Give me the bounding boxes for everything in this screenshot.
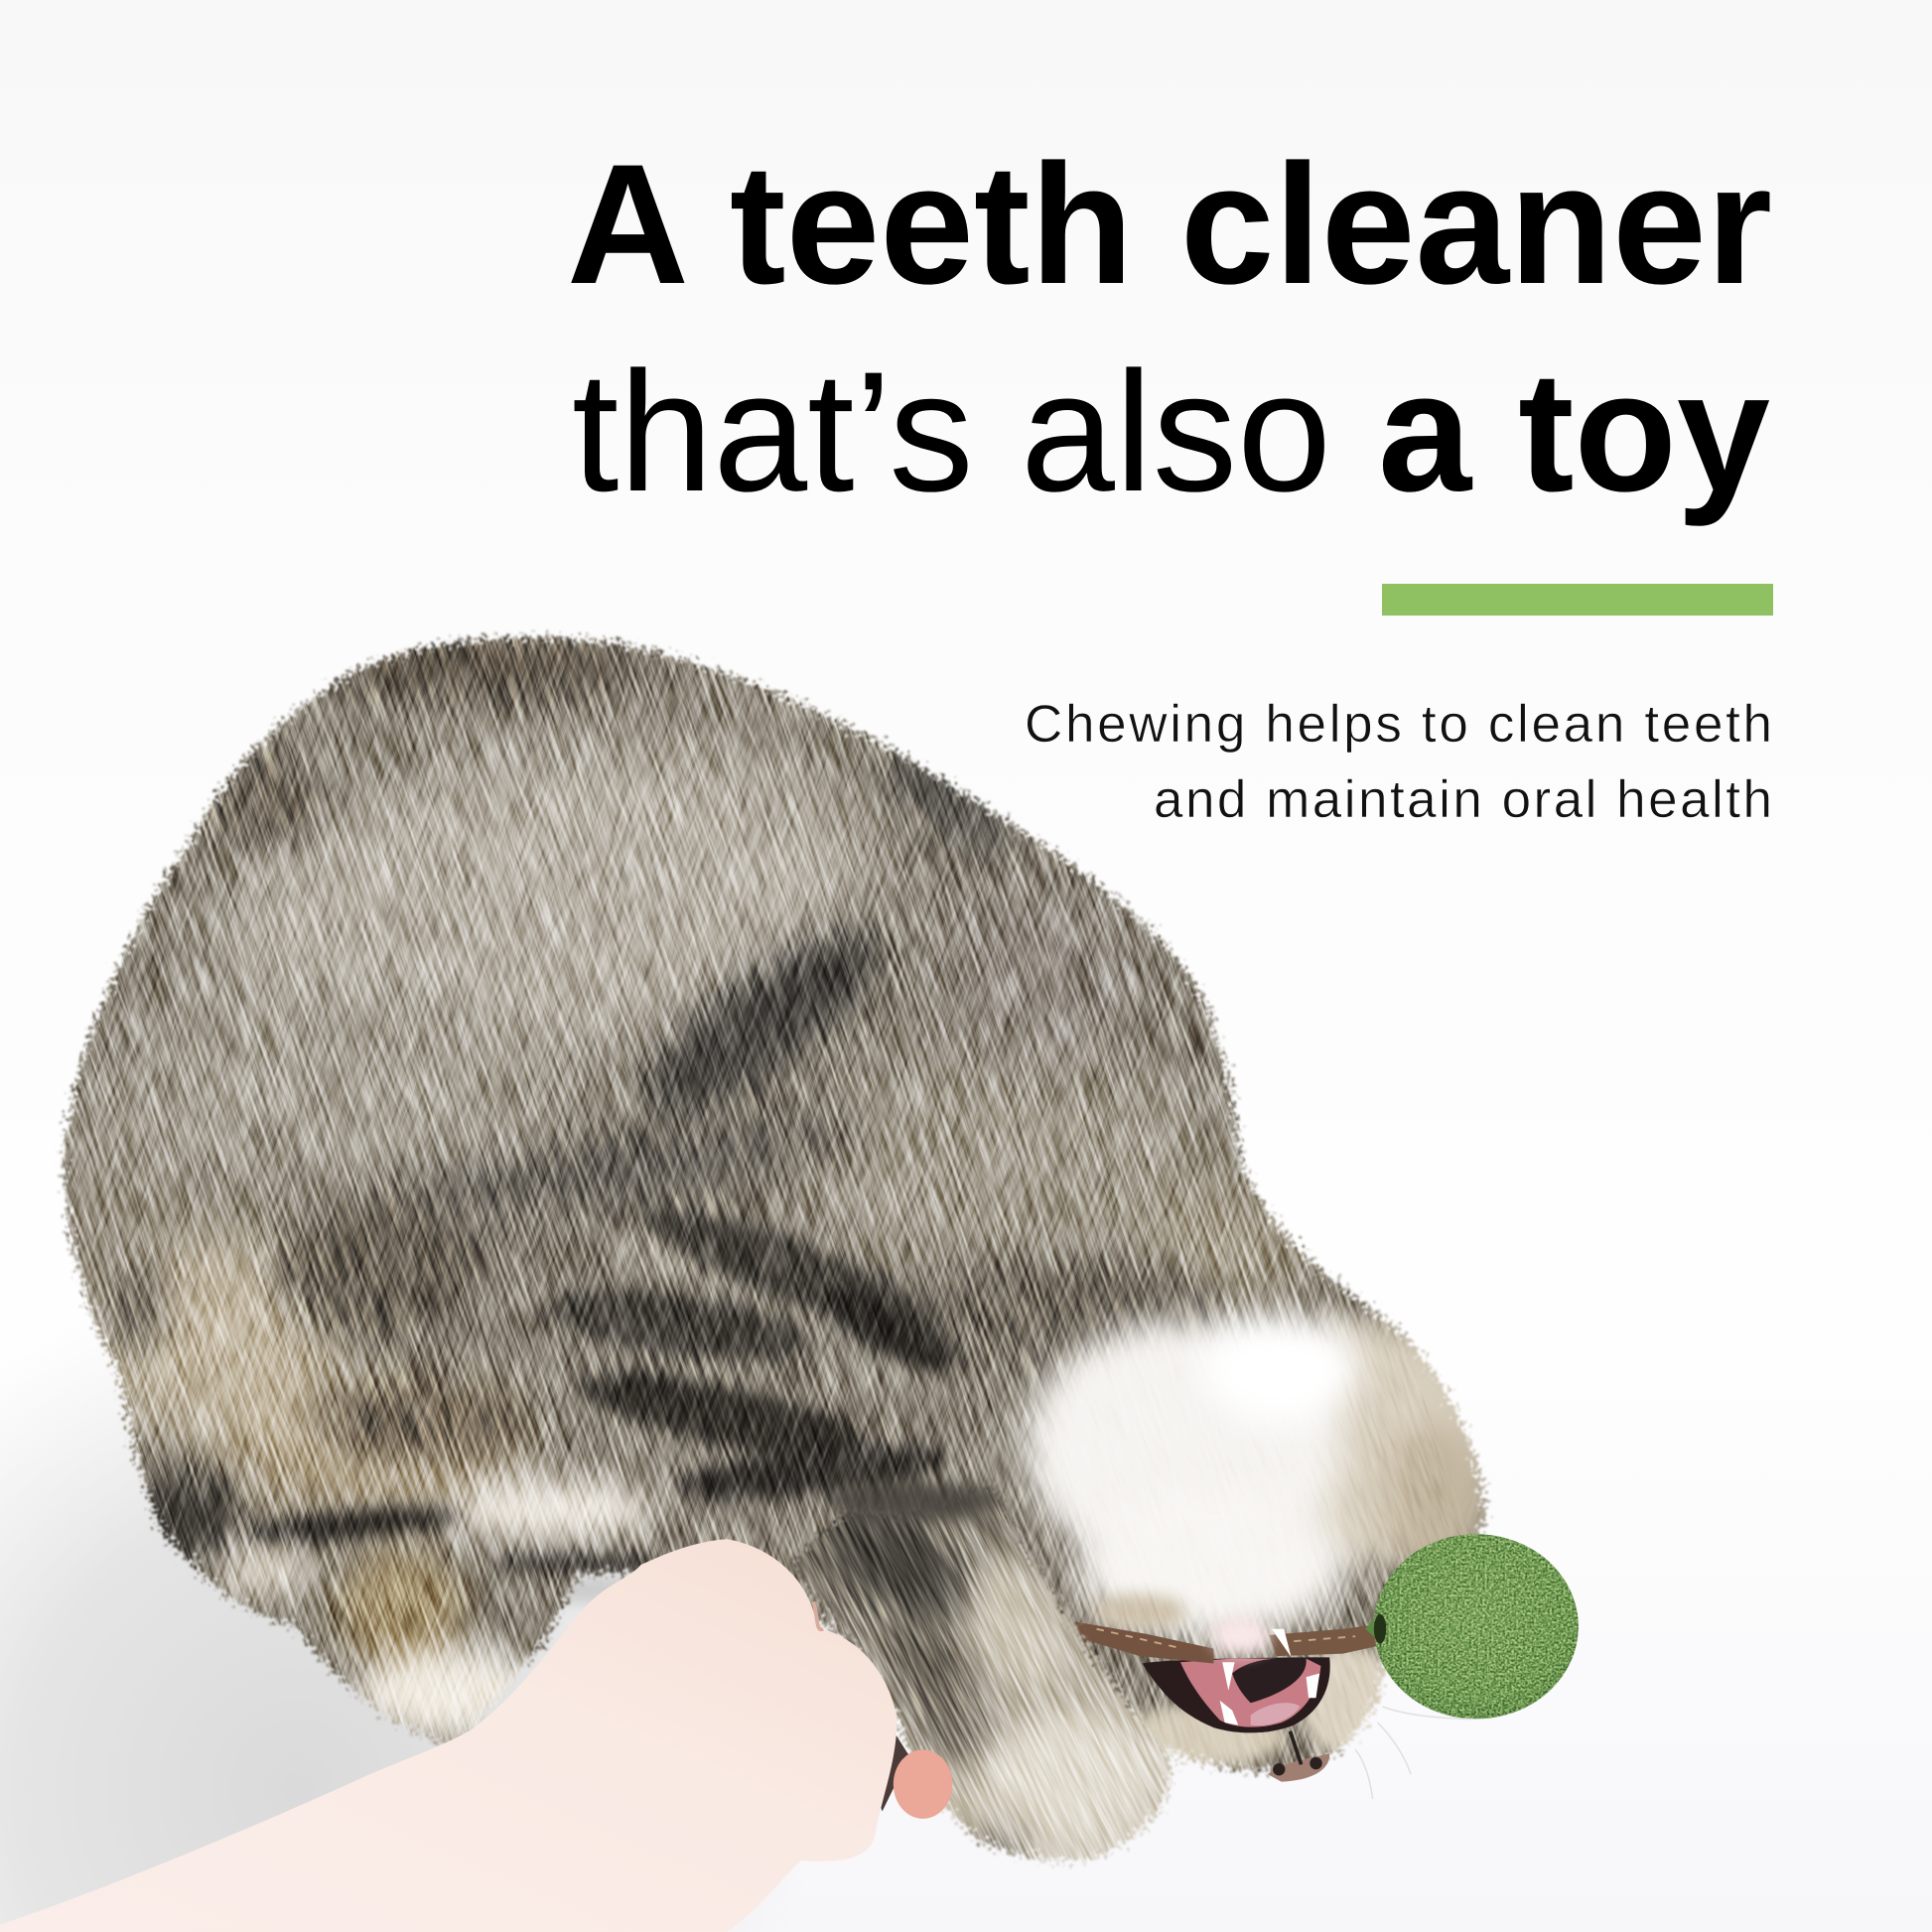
- catnip ball: [1365, 1534, 1579, 1720]
- human hand and arm: [0, 1539, 897, 1932]
- foreleg shoulder blend: [826, 1481, 998, 1521]
- fangs over stick: [1272, 1629, 1292, 1657]
- catnip stick: [1074, 1621, 1383, 1663]
- green accent bar: [1382, 584, 1773, 616]
- subheading: Chewing helps to clean teeth: [1025, 695, 1772, 754]
- pink muzzle tip: [1211, 1618, 1271, 1655]
- photo: cat chewing the catnip toy: [0, 629, 1579, 1932]
- cat body: [57, 629, 1493, 1779]
- fur texture overlay: [58, 629, 1465, 1778]
- cat nose: [1268, 1731, 1329, 1782]
- human fingertip: [869, 1725, 952, 1819]
- pale belly and hind leg: [215, 1477, 659, 1741]
- foreleg and paw: [786, 1478, 1179, 1869]
- title: A teeth cleaner that's also a toy: [567, 129, 1772, 527]
- open mouth and teeth: [1142, 1657, 1330, 1732]
- title: A teeth cleaner that's also a toy: a toy: [1378, 337, 1770, 527]
- white chest and head: [1023, 1312, 1485, 1769]
- floor shadow under the cat: [517, 1573, 863, 1606]
- whiskers: [1355, 1707, 1472, 1799]
- subheading: and maintain oral health: [1154, 770, 1772, 829]
- title: A teeth cleaner that's also a toy: that’s also: [572, 337, 1331, 527]
- title: A teeth cleaner that's also a toy: A teeth cleaner: [567, 129, 1772, 320]
- subheading: [1025, 695, 1772, 829]
